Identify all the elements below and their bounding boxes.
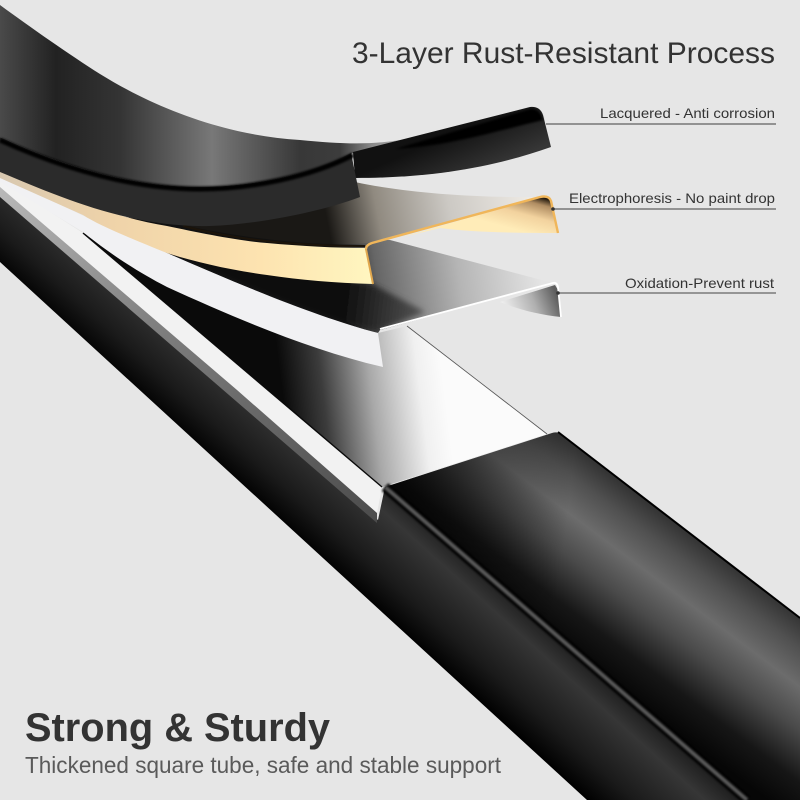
title: 3-Layer Rust-Resistant Process [352, 37, 775, 70]
finished tube top face [385, 432, 800, 800]
oxidation dark lower shade [168, 254, 425, 333]
oxidation curved white band [0, 176, 383, 367]
gold rim [366, 196, 558, 249]
oxidation end face [500, 285, 561, 317]
gold rim front edge [366, 249, 373, 284]
gold end face [403, 196, 558, 237]
tube side face [0, 192, 747, 800]
gold curved band [0, 171, 373, 284]
tube groove highlight [385, 487, 747, 800]
heading: Strong & Sturdy [25, 706, 331, 750]
callout text: Electrophoresis - No paint drop [569, 190, 775, 206]
white rim strip [0, 180, 382, 513]
lacquer rim shadow [395, 109, 543, 149]
callout text: Oxidation-Prevent rust [625, 275, 774, 291]
oxidation inner surface [100, 215, 553, 333]
gold inner surface [183, 175, 540, 244]
black rim line [83, 233, 382, 487]
lacquer upper surface [0, 5, 400, 187]
inner tube floor [83, 233, 547, 487]
oxidation white rim [380, 283, 561, 329]
tube top edge [558, 432, 800, 618]
layer: electrophoresis [0, 171, 558, 284]
gold dark seam [183, 226, 365, 246]
lacquer front band [0, 137, 360, 226]
inner wall thin edge [407, 326, 547, 434]
square tube illustration [0, 180, 747, 800]
layer: lacquered [0, 5, 551, 226]
callout: electrophoresis [551, 190, 776, 211]
callout: oxidation [556, 275, 776, 295]
lacquer end piece [353, 107, 551, 178]
lacquer ridge shadow [0, 140, 353, 189]
tube groove shadow [385, 487, 747, 800]
callout text: Lacquered - Anti corrosion [600, 105, 775, 121]
gray rim strip [0, 183, 377, 523]
subheading: Thickened square tube, safe and stable support [25, 752, 502, 778]
tube top surface [385, 432, 800, 800]
tube top shade [385, 432, 700, 674]
layer: oxidation [0, 176, 561, 367]
